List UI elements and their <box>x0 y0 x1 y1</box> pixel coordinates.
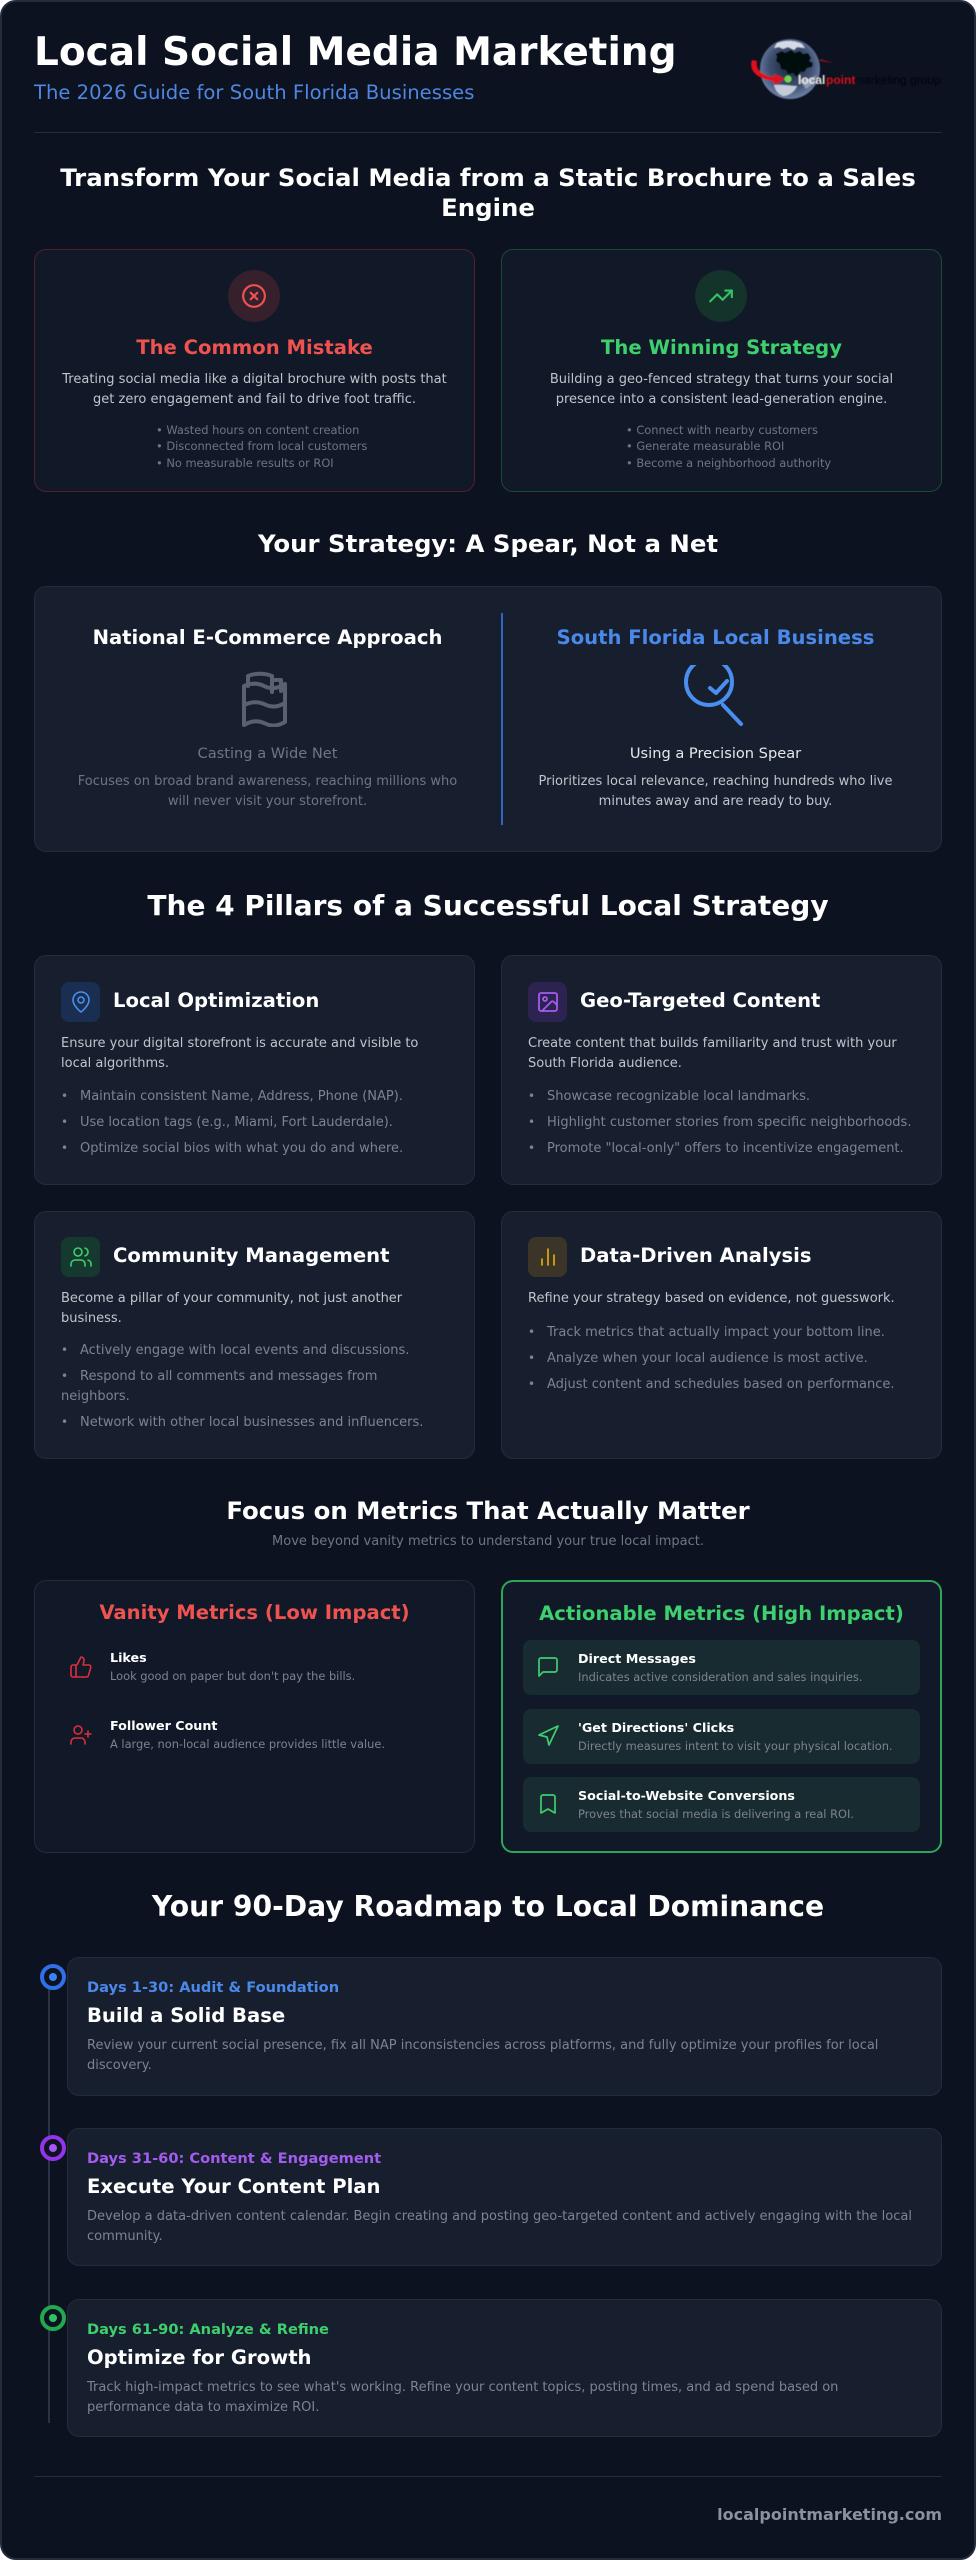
local subheading: Using a Precision Spear <box>630 745 801 762</box>
panel: spear vs net <box>34 586 942 852</box>
mistake bullets: • Disconnected from local customers <box>156 439 367 453</box>
card description: Ensure your digital storefront is accurate and visible to <box>61 1036 418 1051</box>
card: step 3: performance data to maximize ROI. <box>87 2400 319 2414</box>
heading: roadmap: Your 90-Day Roadmap to Local Dominance <box>152 1890 824 1923</box>
icon: precision spear <box>684 665 744 726</box>
card list: • <box>528 1351 535 1365</box>
heading: pillars: The 4 Pillars of a Successful Local Strategy <box>147 889 829 922</box>
icon: image <box>528 982 567 1022</box>
card: step 2: community. <box>87 2228 163 2244</box>
mistake description: Treating social media like a digital brochure with posts that <box>62 372 447 387</box>
winning description <box>550 372 893 406</box>
icon: wide net <box>242 672 287 727</box>
card list: Actively engage with local events and discussions. <box>80 1343 409 1358</box>
national description: will never visit your storefront. <box>168 794 367 808</box>
metric: likes: Look good on paper but don't pay the bills. <box>110 1669 355 1683</box>
panel: local optimization <box>34 955 475 1185</box>
card: step 2: Days 31-60: Content & Engagement <box>87 2150 381 2167</box>
heading: strategy: Your Strategy: A Spear, Not a Net <box>258 529 718 558</box>
card list: Highlight customer stories from specific neighborhoods. <box>547 1115 911 1130</box>
local description <box>538 774 892 808</box>
timeline line <box>48 1965 50 2423</box>
card list: • <box>528 1115 535 1129</box>
panel: winning strategy <box>501 249 942 492</box>
icon: user plus <box>70 1725 92 1745</box>
heading: transform: Transform Your Social Media from a Static Brochure to a Sales <box>60 163 916 192</box>
national description <box>78 774 457 808</box>
timeline step 3 <box>40 2299 942 2437</box>
icon: map pin <box>61 982 100 1022</box>
mistake heading: The Common Mistake <box>136 336 373 359</box>
card description: Become a pillar of your community, not just another <box>61 1291 402 1306</box>
national description: Focuses on broad brand awareness, reaching millions who <box>78 774 457 789</box>
mistake bullets <box>156 423 367 470</box>
card list: • <box>61 1141 68 1155</box>
winning description: Building a geo-fenced strategy that turns your social <box>550 372 893 387</box>
metric: direct messages <box>523 1640 920 1695</box>
heading: transform <box>60 163 916 222</box>
card description: business. <box>61 1310 122 1326</box>
metric: get directions: 'Get Directions' Clicks <box>578 1720 734 1735</box>
metrics subtitle: Move beyond vanity metrics to understand your true local impact. <box>272 1534 704 1549</box>
card description: Create content that builds familiarity and trust with your <box>528 1036 897 1051</box>
title: Local Social Media Marketing <box>34 30 676 75</box>
metric: likes: Likes <box>110 1650 147 1665</box>
icon: bar chart <box>528 1237 567 1277</box>
heading: metrics: Focus on Metrics That Actually Matter <box>226 1496 750 1525</box>
card: step 3: Track high-impact metrics to see what's working. Refine your content topics, posting times, and ad spend based on <box>87 2380 838 2395</box>
header <box>34 30 941 104</box>
card description: local algorithms. <box>61 1056 169 1070</box>
logo: marketing group <box>854 73 941 87</box>
metric: conversions: Proves that social media is delivering a real ROI. <box>578 1807 854 1821</box>
panel: actionable metrics <box>501 1580 942 1853</box>
card list <box>61 1343 423 1430</box>
card title: Data-Driven Analysis <box>580 1244 812 1267</box>
card list: • <box>528 1325 535 1339</box>
timeline step 1 <box>40 1957 942 2096</box>
winning bullets: • Become a neighborhood authority <box>626 456 831 470</box>
card list: • <box>61 1414 68 1428</box>
subtitle: The 2026 Guide for South Florida Businesses <box>34 81 474 104</box>
card list: • <box>528 1141 535 1155</box>
icon: x circle <box>228 270 280 322</box>
metric: direct messages: Direct Messages <box>578 1651 696 1666</box>
metric: get directions: Directly measures intent to visit your physical location. <box>578 1739 893 1753</box>
icon: thumbs up <box>70 1656 92 1678</box>
panel: vanity metrics <box>34 1580 475 1853</box>
panel: data-driven analysis <box>501 1211 942 1459</box>
card list: Optimize social bios with what you do and where. <box>80 1141 403 1156</box>
card list: Network with other local businesses and influencers. <box>80 1414 423 1430</box>
card title: Local Optimization <box>113 989 319 1012</box>
card description <box>61 1291 402 1326</box>
local description: Prioritizes local relevance, reaching hundreds who live <box>538 774 892 789</box>
card: step 3: Optimize for Growth <box>87 2346 312 2369</box>
card: step 1: Days 1-30: Audit & Foundation <box>87 1979 339 1996</box>
winning bullets: • Generate measurable ROI <box>626 439 784 453</box>
winning heading: The Winning Strategy <box>601 336 842 359</box>
metric: follower count: Follower Count <box>110 1718 217 1733</box>
card: step 3: Days 61-90: Analyze & Refine <box>87 2321 329 2338</box>
panel: common mistake <box>34 249 475 492</box>
card title: Community Management <box>113 1244 389 1267</box>
card list: • <box>528 1089 535 1103</box>
card list: • <box>528 1377 535 1391</box>
card list: • <box>61 1369 68 1383</box>
icon: message <box>538 1657 558 1677</box>
card list: Track metrics that actually impact your bottom line. <box>547 1325 885 1340</box>
logo: local <box>798 73 825 87</box>
national title: National E-Commerce Approach <box>93 626 442 649</box>
national subheading: Casting a Wide Net <box>198 745 337 762</box>
card list: • <box>61 1343 68 1357</box>
panel: geo-targeted content <box>501 955 942 1185</box>
card description: South Florida audience. <box>528 1056 682 1070</box>
metric: direct messages: Indicates active consideration and sales inquiries. <box>578 1670 862 1684</box>
mistake bullets: • Wasted hours on content creation <box>156 423 359 437</box>
timeline step 2 <box>40 2128 942 2266</box>
vanity title: Vanity Metrics (Low Impact) <box>99 1601 410 1624</box>
card list: • <box>61 1089 68 1103</box>
card list <box>528 1089 911 1156</box>
card description <box>61 1036 418 1070</box>
card list <box>528 1325 895 1392</box>
dot: step 3 <box>40 2305 66 2331</box>
card: step 2: Execute Your Content Plan <box>87 2175 380 2198</box>
card list: Showcase recognizable local landmarks. <box>547 1089 810 1104</box>
card description <box>528 1036 897 1070</box>
card list: Promote "local-only" offers to incentivize engagement. <box>547 1141 904 1156</box>
card: step 1: Review your current social presence, fix all NAP inconsistencies across platforms, and fully optimize your profiles for local <box>87 2038 878 2053</box>
card list: Adjust content and schedules based on performance. <box>547 1377 895 1392</box>
metric: follower count: A large, non-local audience provides little value. <box>110 1737 385 1751</box>
local description: minutes away and are ready to buy. <box>599 794 832 808</box>
winning bullets <box>626 423 831 470</box>
heading: transform: Engine <box>441 193 535 222</box>
icon: trending up <box>695 270 747 322</box>
mistake description: get zero engagement and fail to drive foot traffic. <box>93 392 416 406</box>
card list: Analyze when your local audience is most active. <box>547 1351 868 1366</box>
card: step 3 <box>67 2299 942 2437</box>
actionable title: Actionable Metrics (High Impact) <box>539 1602 904 1625</box>
metric: conversions: Social-to-Website Conversions <box>578 1788 795 1803</box>
card list <box>61 1089 403 1156</box>
card: step 1 <box>67 1957 942 2096</box>
metric: conversions <box>523 1777 920 1832</box>
card list: neighbors. <box>61 1388 130 1404</box>
card list: Maintain consistent Name, Address, Phone (NAP). <box>80 1089 403 1104</box>
card list: Respond to all comments and messages from <box>80 1369 377 1384</box>
card title: Geo-Targeted Content <box>580 989 820 1012</box>
card: step 1: discovery. <box>87 2058 152 2072</box>
dot: step 2 <box>40 2135 66 2161</box>
mistake description <box>62 372 447 406</box>
metric: get directions <box>523 1709 920 1764</box>
center divider <box>501 613 503 825</box>
card: step 2 <box>67 2128 942 2266</box>
metric: likes <box>70 1650 355 1683</box>
card description: Refine your strategy based on evidence, not guesswork. <box>528 1291 895 1306</box>
card: step 2: Develop a data-driven content calendar. Begin creating and posting geo-targeted content and actively engaging with the local <box>87 2209 912 2224</box>
dot: step 1 <box>40 1964 66 1990</box>
icon: navigation <box>538 1725 559 1746</box>
footer url: localpointmarketing.com <box>717 2505 942 2524</box>
icon: bookmark <box>540 1794 556 1814</box>
card list: Use location tags (e.g., Miami, Fort Lauderdale). <box>80 1115 393 1130</box>
local title: South Florida Local Business <box>557 626 874 649</box>
metric: follower count <box>70 1718 385 1751</box>
card: step 1: Build a Solid Base <box>87 2004 285 2027</box>
panel: community management <box>34 1211 475 1459</box>
logo: point <box>826 73 855 87</box>
card list: • <box>61 1115 68 1129</box>
logo <box>750 38 941 100</box>
mistake bullets: • No measurable results or ROI <box>156 456 334 470</box>
winning bullets: • Connect with nearby customers <box>626 423 818 437</box>
icon: users <box>61 1237 100 1277</box>
winning description: presence into a consistent lead-generation engine. <box>556 392 887 406</box>
